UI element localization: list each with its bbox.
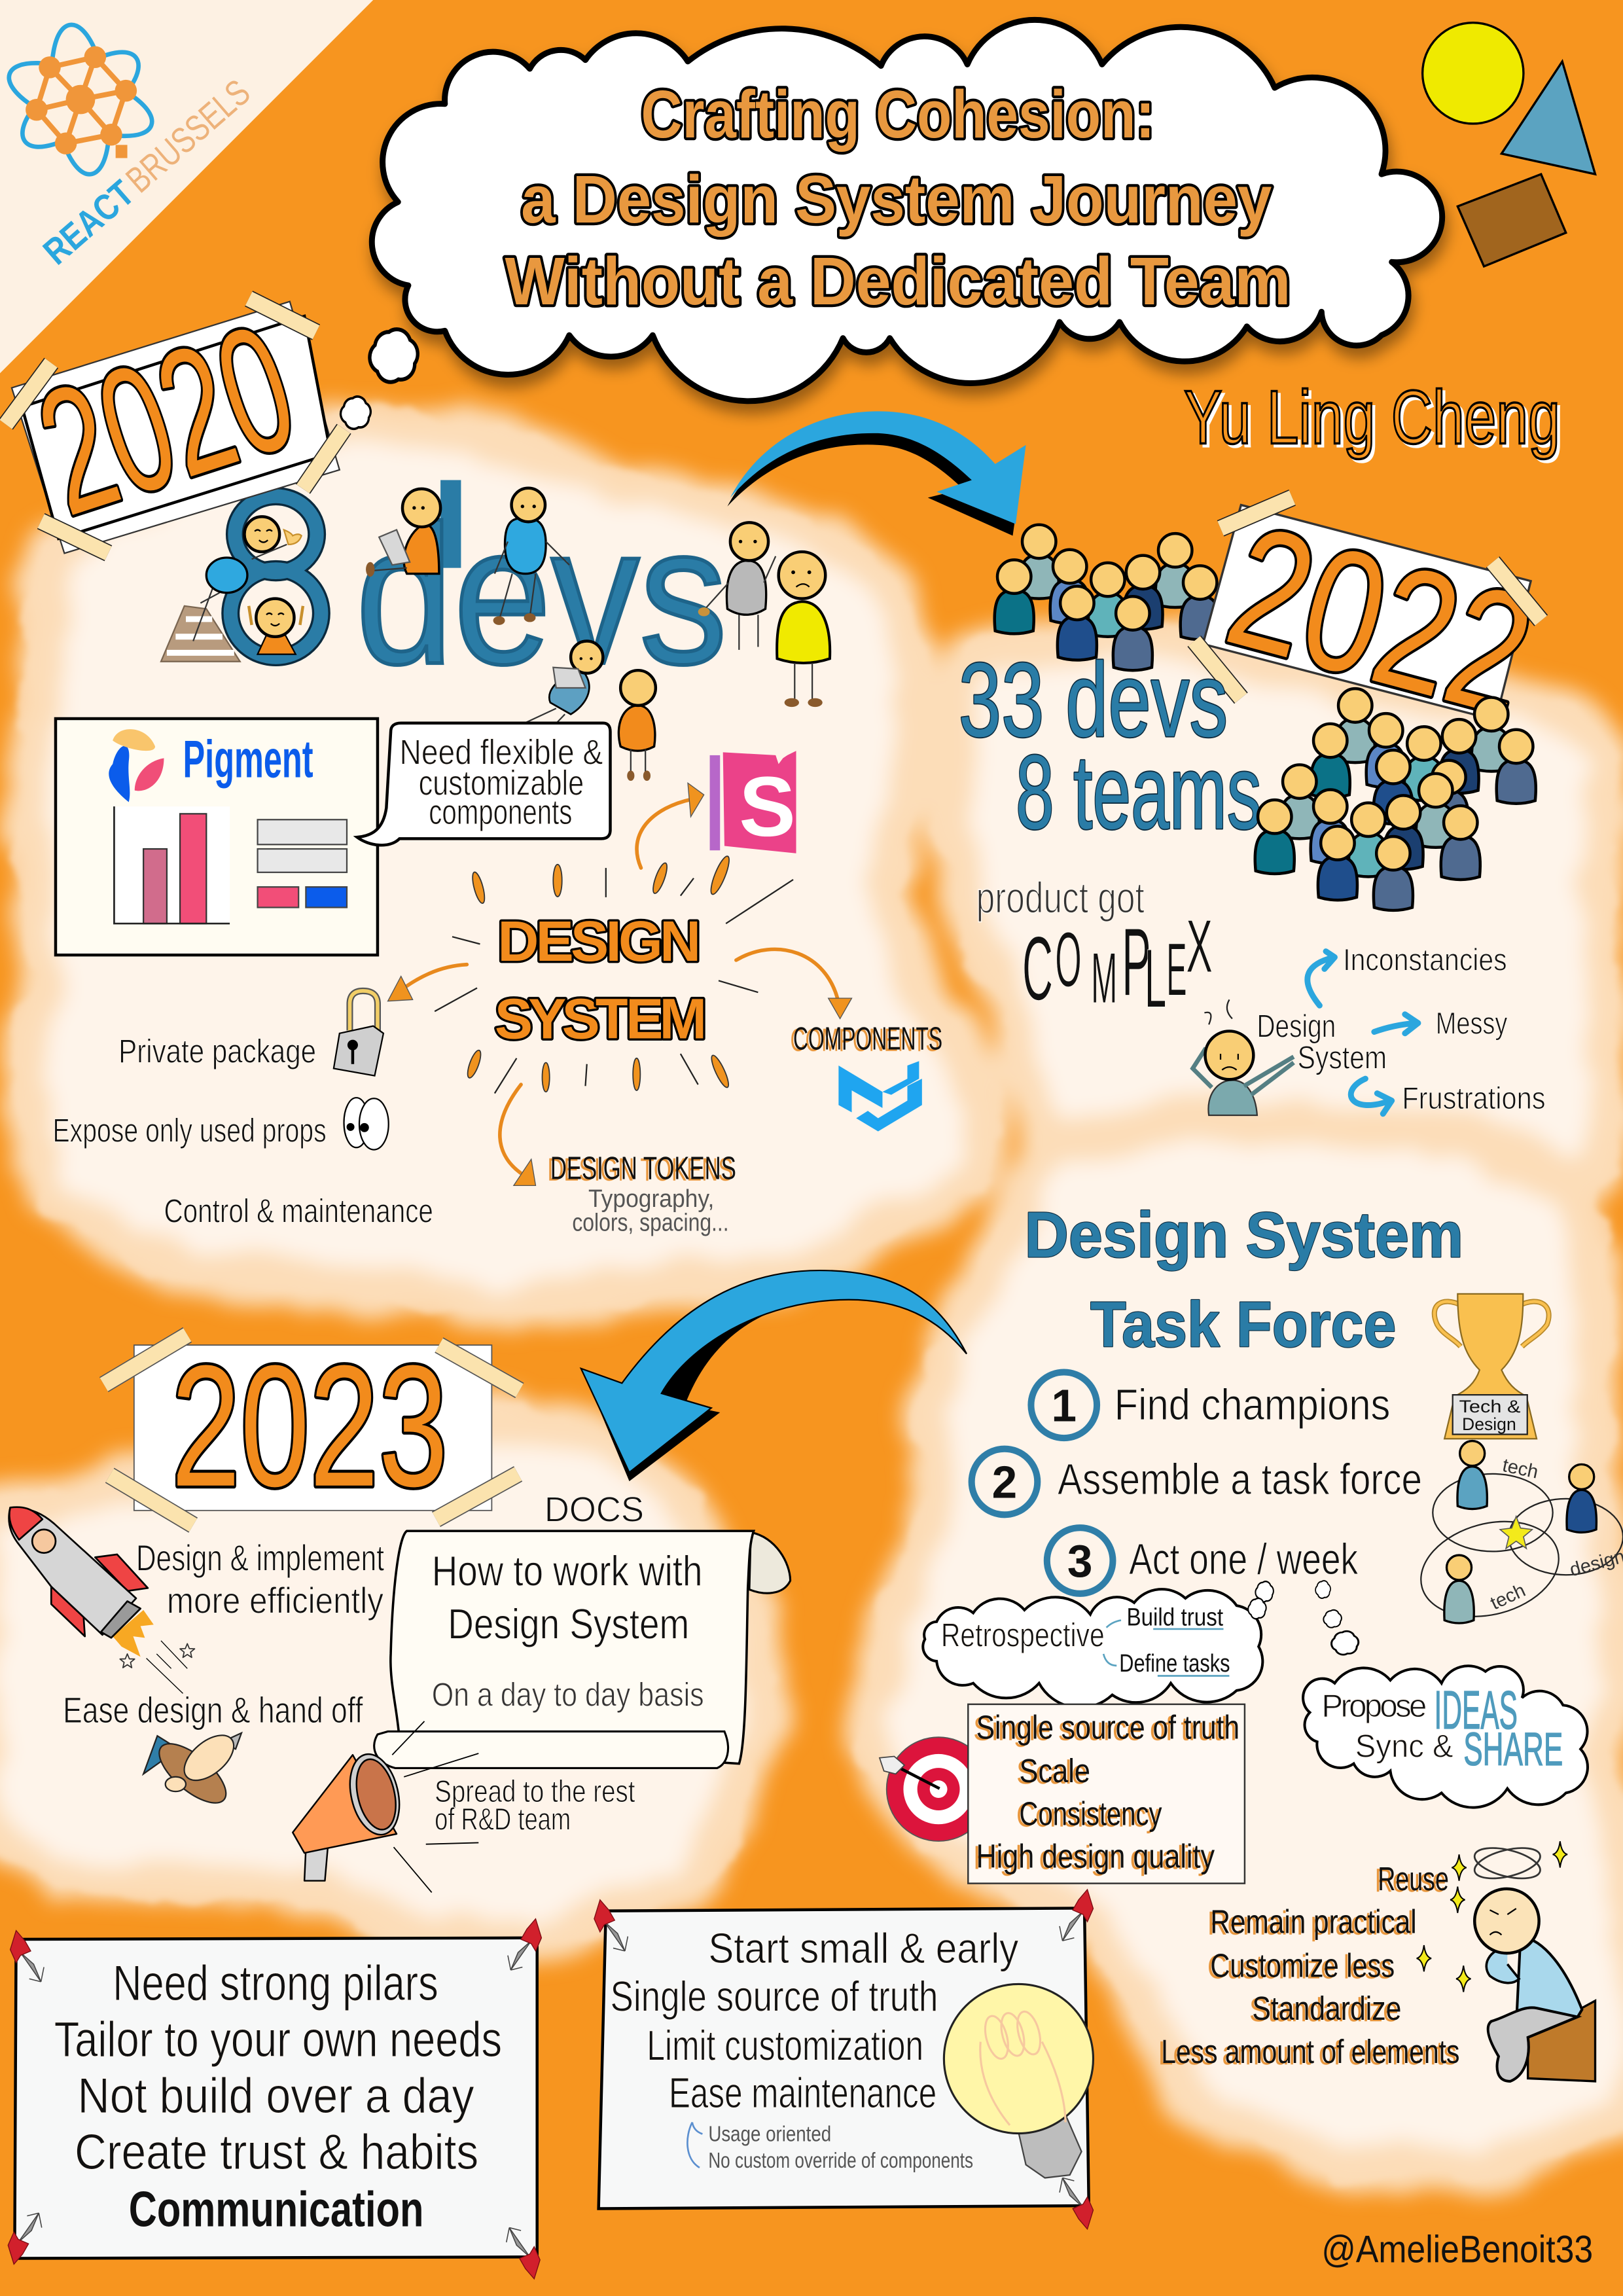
bar chart bbox=[114, 806, 230, 924]
scroll: docs: On a day to day basis bbox=[432, 1675, 704, 1713]
orange person bbox=[618, 670, 656, 781]
sign: 2023: 2023 bbox=[171, 1329, 448, 1522]
text: spread: Spread to the rest bbox=[435, 1774, 635, 1808]
text: components: COMPONENTS bbox=[793, 1020, 942, 1056]
card: need strong pilars bbox=[8, 1919, 541, 2279]
text: product got complex: X bbox=[1186, 905, 1213, 988]
person on the ladder bbox=[193, 516, 302, 641]
text: product got complex: product got bbox=[976, 874, 1145, 923]
cloud: retrospective: Build trust bbox=[1126, 1604, 1223, 1631]
title cloud bbox=[372, 20, 1442, 401]
cloud: retrospective: Define tasks bbox=[1119, 1650, 1230, 1677]
text: design system problems: Design bbox=[1257, 1009, 1336, 1045]
icon: target bbox=[887, 1737, 990, 1841]
big 8 bbox=[230, 496, 321, 657]
arrow: to components bbox=[736, 949, 851, 1018]
box: benefits: Scale bbox=[1020, 1751, 1090, 1789]
title text bbox=[505, 77, 1291, 319]
step 2 bbox=[972, 1449, 1422, 1515]
icon: pigment logo bbox=[109, 729, 164, 802]
card: start small: Limit customization bbox=[647, 2022, 923, 2070]
box: benefits bbox=[968, 1704, 1245, 1884]
icon: yellow circle bbox=[1423, 23, 1524, 124]
text: reuse list: Reuse bbox=[1378, 1859, 1449, 1897]
label: pigment: Pigment bbox=[183, 730, 313, 789]
step 1: 1 bbox=[1051, 1380, 1077, 1431]
card: start small bbox=[594, 1890, 1093, 2229]
step 3 bbox=[1047, 1528, 1359, 1594]
arrow: to design tokens bbox=[500, 1085, 535, 1185]
text: design system problems bbox=[1257, 942, 1545, 1115]
box: benefits: Single source of truth bbox=[976, 1708, 1240, 1746]
step 1: Find champions bbox=[1115, 1380, 1390, 1429]
text: product got complex: P bbox=[1122, 908, 1151, 1016]
icon: mui logo bbox=[838, 1061, 922, 1132]
text: design tokens: colors, spacing... bbox=[572, 1210, 729, 1237]
text: product got complex: E bbox=[1166, 929, 1187, 1012]
text: product got complex bbox=[976, 874, 1213, 1026]
heading: task force bbox=[1024, 1198, 1463, 1360]
heading: design system: DESIGN bbox=[497, 910, 701, 973]
crowd: 2022 lower group bbox=[1255, 764, 1480, 910]
logo text: react brussels: BRUSSELS bbox=[118, 71, 258, 200]
card: need strong pilars: Create trust & habits bbox=[75, 2125, 478, 2180]
card: need strong pilars: Communication bbox=[129, 2181, 423, 2237]
person lying with laptop bbox=[507, 641, 603, 746]
card: need strong pilars: Tailor to your own needs bbox=[54, 2012, 502, 2068]
text: product got complex: C bbox=[1022, 918, 1053, 1019]
callout: flexible components: customizable bbox=[419, 763, 584, 802]
icon: brown rectangle bbox=[1457, 174, 1566, 266]
cloud: propose ideas: SHARE bbox=[1463, 1723, 1563, 1776]
arrow: to lock bbox=[388, 965, 467, 1001]
text: design system problems: Inconstancies bbox=[1343, 942, 1507, 977]
logo text: react brussels: REACT bbox=[35, 172, 142, 272]
card: need strong pilars: Need strong pilars bbox=[113, 1956, 438, 2011]
cloud: propose ideas: IDEAS bbox=[1435, 1679, 1518, 1740]
heading: 33 devs 8 teams: 8 teams bbox=[1016, 734, 1262, 852]
icon: blue triangle bbox=[1501, 62, 1596, 174]
heading: design system: SYSTEM bbox=[495, 988, 707, 1051]
arrow: to storybook bbox=[637, 783, 704, 868]
grey person bbox=[698, 522, 776, 650]
text: design system problems: Frustrations bbox=[1402, 1081, 1545, 1115]
heading: 33 devs 8 teams bbox=[959, 641, 1262, 852]
card: start small: Ease maintenance bbox=[669, 2069, 936, 2117]
icon: target arrow bbox=[880, 1756, 940, 1789]
scroll: docs: Design System bbox=[448, 1600, 689, 1647]
text: design and implement: more efficiently bbox=[167, 1579, 383, 1621]
watercolor blobs bbox=[0, 423, 1623, 2169]
label: devs: devs bbox=[355, 484, 727, 705]
text: reuse list: Standardize bbox=[1252, 1989, 1401, 2027]
text: design tokens: Typography, bbox=[588, 1185, 714, 1213]
arrow: 2022 to 2023 bbox=[581, 1270, 967, 1481]
title text: Crafting Cohesion: bbox=[641, 77, 1154, 152]
sign: 2020: 2020 bbox=[18, 286, 315, 553]
logo: react brussels bbox=[3, 24, 158, 175]
heading: 33 devs 8 teams: 33 devs bbox=[959, 641, 1228, 759]
callout: flexible components: Need flexible & bbox=[399, 732, 603, 772]
icon: trophy: Tech & bbox=[1459, 1397, 1521, 1416]
yellow person bbox=[777, 552, 830, 707]
box: benefits: High design quality bbox=[976, 1837, 1215, 1874]
step 3: Act one / week bbox=[1129, 1535, 1359, 1584]
card: start small: No custom override of components bbox=[708, 2149, 973, 2173]
heading: design system bbox=[495, 910, 707, 1051]
text: spread: of R&D team bbox=[435, 1801, 571, 1836]
scroll: docs: DOCS bbox=[544, 1490, 644, 1530]
text: reuse list: Customize less bbox=[1210, 1946, 1395, 1984]
icon: megaphone bbox=[293, 1721, 478, 1892]
cloud: propose ideas: Propose bbox=[1321, 1688, 1427, 1724]
sign: 2020 bbox=[6, 286, 344, 553]
icon: storybook bbox=[710, 751, 796, 854]
thinking person on box bbox=[1417, 1841, 1596, 2081]
diagram: overlapping teams bbox=[1410, 1441, 1623, 1631]
panel: pigment card bbox=[56, 719, 378, 955]
text: reuse list bbox=[1161, 1859, 1459, 2070]
cloud: propose ideas: Sync & bbox=[1355, 1729, 1454, 1765]
scroll: docs bbox=[374, 1490, 791, 1768]
person inside the 8 bbox=[249, 599, 303, 655]
text: design system problems: System bbox=[1298, 1039, 1387, 1075]
diagram: overlapping teams: tech bbox=[1501, 1455, 1540, 1483]
text: design system problems: Messy bbox=[1436, 1006, 1508, 1041]
panel: 2023 bbox=[9, 1329, 791, 1892]
thought puffs bbox=[341, 329, 418, 429]
crowd: 2022 top group bbox=[995, 525, 1220, 670]
cloud: propose ideas bbox=[1303, 1666, 1588, 1808]
text: design tokens: DESIGN TOKENS bbox=[550, 1151, 736, 1187]
card: start small: Start small & early bbox=[708, 1924, 1019, 1972]
card: need strong pilars: Not build over a day bbox=[78, 2068, 474, 2124]
text: control and maintenance: Control & maintenance bbox=[164, 1191, 433, 1229]
cloud: retrospective bbox=[923, 1589, 1262, 1708]
step 1 bbox=[1031, 1372, 1390, 1438]
card: start small: Single source of truth bbox=[611, 1973, 938, 2020]
icon: trophy bbox=[1435, 1294, 1549, 1439]
text: product got complex: M bbox=[1091, 939, 1117, 1018]
text: product got complex: L bbox=[1145, 933, 1166, 1026]
callout: flexible components bbox=[357, 723, 611, 845]
panel: 2020 bbox=[161, 480, 830, 781]
worried person pointing bbox=[1193, 999, 1294, 1115]
title text: a Design System Journey bbox=[521, 162, 1272, 237]
text: reuse list: Less amount of elements bbox=[1161, 2032, 1459, 2070]
logo text: react brussels bbox=[35, 71, 258, 272]
thought puffs bbox=[1248, 1581, 1359, 1655]
corner banner bbox=[0, 0, 373, 373]
title text: Without a Dedicated Team bbox=[505, 243, 1291, 319]
text: ease design: Ease design & hand off bbox=[63, 1689, 363, 1731]
cloud: retrospective: Retrospective bbox=[941, 1615, 1105, 1653]
icon: eyes bbox=[344, 1098, 389, 1150]
step 2: Assemble a task force bbox=[1058, 1455, 1422, 1504]
step 2: 2 bbox=[992, 1457, 1017, 1508]
text: reuse list: Remain practical bbox=[1210, 1902, 1417, 1940]
heading: task force: Design System bbox=[1024, 1198, 1463, 1270]
burst rays bbox=[435, 854, 793, 1093]
credit: @AmelieBenoit33 bbox=[1321, 2228, 1593, 2270]
text: design tokens bbox=[550, 1151, 736, 1237]
icon: rocket bbox=[9, 1507, 194, 1693]
person sitting on letter e bbox=[493, 488, 569, 625]
diagram: overlapping teams: tech bbox=[1488, 1580, 1529, 1614]
icon: ladder bbox=[161, 606, 240, 662]
card: start small: Usage oriented bbox=[708, 2123, 831, 2147]
arrows: design system problems bbox=[1308, 952, 1418, 1114]
text: private package: Private package bbox=[118, 1032, 316, 1070]
icon: handshake bbox=[143, 1727, 241, 1813]
arrow: 2020 to 2022 bbox=[727, 411, 1026, 535]
text: expose only used props: Expose only used props bbox=[53, 1111, 327, 1149]
ui blocks bbox=[258, 819, 347, 907]
box: benefits: Consistency bbox=[1020, 1795, 1162, 1833]
heading: task force: Task Force bbox=[1090, 1288, 1396, 1360]
sign: 2022: 2022 bbox=[1211, 488, 1551, 753]
crowd: 2022 right group bbox=[1311, 689, 1536, 834]
step 3: 3 bbox=[1067, 1535, 1092, 1587]
text: design and implement bbox=[136, 1537, 384, 1621]
person with laptop bbox=[366, 489, 440, 577]
icon: storybook: S bbox=[739, 760, 796, 854]
icon: padlock bbox=[334, 991, 383, 1076]
text: spread bbox=[435, 1774, 635, 1836]
scroll: docs: How to work with bbox=[432, 1547, 702, 1595]
icon: trophy: Design bbox=[1462, 1414, 1516, 1434]
icon: light bulb bbox=[944, 1984, 1093, 2178]
callout: flexible components: components bbox=[429, 793, 572, 832]
panel: task force bbox=[880, 1198, 1623, 2081]
text: design and implement: Design & implement bbox=[136, 1537, 384, 1578]
text: product got complex: O bbox=[1055, 917, 1082, 1003]
